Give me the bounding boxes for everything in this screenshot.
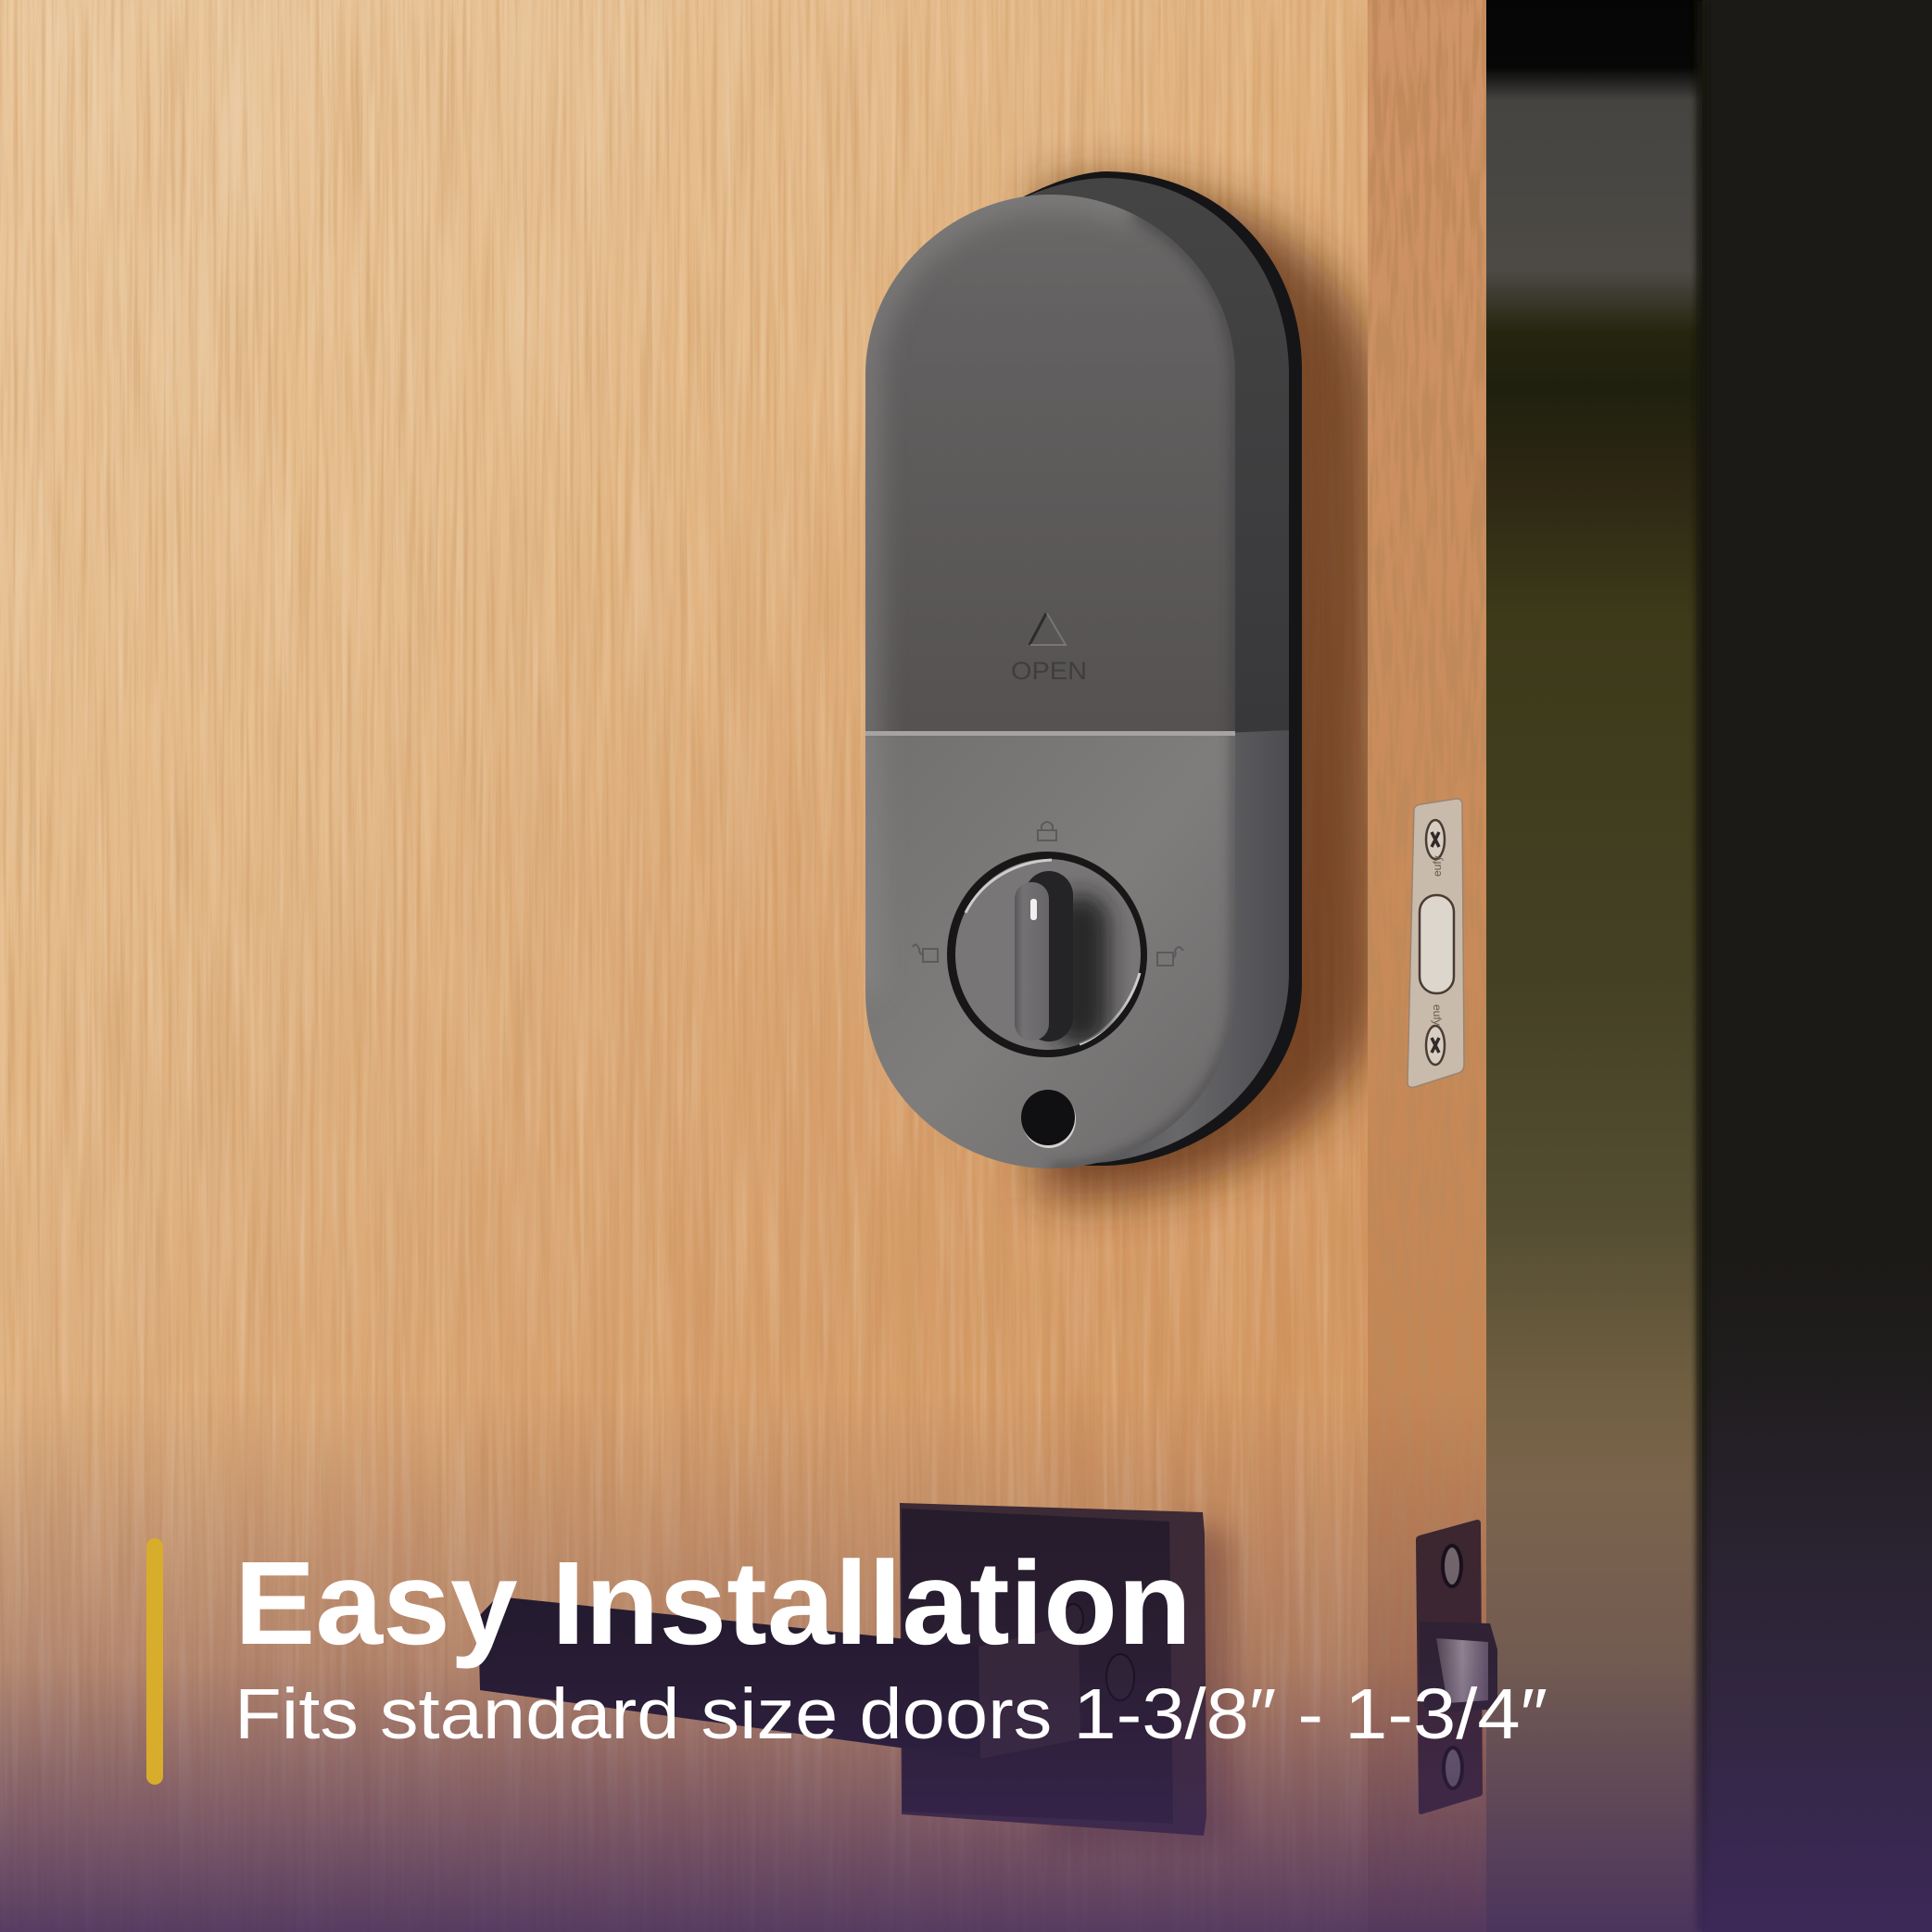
lock front base [865,736,1235,1168]
icon: locked position [1038,822,1056,840]
outdoor background [1473,0,1932,1932]
bottom purple gradient overlay [0,1390,1932,1932]
lock back housing [1024,171,1302,1166]
turn knob back [1025,871,1073,1042]
icon: strike latch plate on door edge: eufy [1431,855,1444,877]
OPEN label: OPEN [1011,657,1087,685]
lever body [478,1597,980,1759]
rosette shadow [1038,1520,1232,1844]
latch screws [1443,1546,1462,1788]
dial highlights [966,860,1140,1044]
rosette edge [900,1503,1206,1836]
lock side panel upper [1027,178,1289,734]
rosette screws [1063,1604,1134,1700]
icon: door latch and plate [1416,1520,1497,1814]
icon: open triangle [1029,613,1066,645]
turn knob front [1015,882,1049,1041]
icon: strike latch plate on door edge [1408,799,1464,1087]
turn shadow [1052,894,1109,1047]
smart lock [865,171,1302,1168]
panel: door edge [1368,0,1486,1932]
icon: unlocked right [1157,947,1183,966]
lock drop shadow [1038,181,1381,1197]
panel: door face [0,0,1369,1932]
turn indicator [1030,899,1037,920]
lock edge highlight [865,195,1235,1168]
lock side panel lower [1066,730,1289,1166]
lever end face [979,1623,1080,1759]
rosette face [902,1509,1173,1824]
icon: strike latch plate on door edge: eufy [1431,1004,1444,1026]
icon: unlocked left [913,944,938,962]
accent bar [146,1538,163,1785]
icon: door lever and rosette [478,1503,1232,1844]
heading: Easy Installation [234,1537,1192,1670]
latch bolt housing [1420,1622,1497,1712]
thumbturn dial [947,852,1147,1057]
subheading: Fits standard size doors 1-3/8″ - 1-3/4″ [234,1674,1547,1754]
key cylinder [1021,1090,1076,1148]
cover seam highlight [865,731,1235,736]
latch bolt [1436,1638,1488,1703]
lock front cover [865,195,1235,732]
